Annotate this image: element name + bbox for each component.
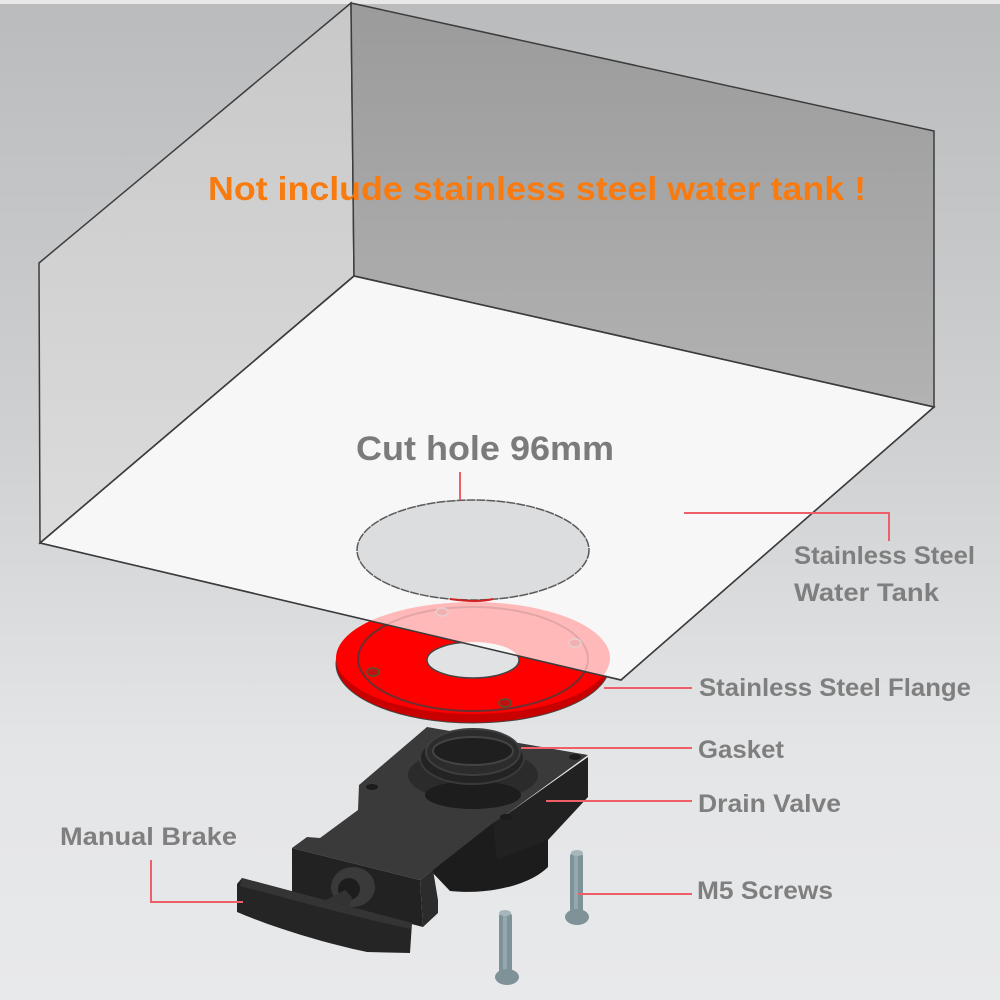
flange disc	[336, 602, 610, 714]
brake knob	[331, 867, 375, 907]
stainless steel flange label: Stainless Steel Flange	[699, 674, 971, 702]
drain valve	[237, 727, 588, 953]
stainless steel water tank label: Water Tank	[794, 579, 939, 607]
cut hole	[357, 500, 589, 601]
M5 screw right	[565, 850, 589, 925]
warning title: Not include stainless steel water tank !	[208, 170, 866, 207]
flange seen through tank floor	[372, 602, 610, 675]
flange bolt holes	[367, 668, 379, 676]
stainless steel water tank label: Stainless Steel	[794, 542, 975, 570]
M5 screw left	[495, 910, 519, 985]
manual brake handle	[237, 878, 412, 953]
flange	[336, 602, 610, 723]
drain valve label: Drain Valve	[698, 790, 841, 818]
valve side face	[493, 757, 588, 860]
slider front face	[292, 848, 423, 927]
cut hole label: Cut hole 96mm	[356, 430, 614, 468]
tank floor	[40, 276, 934, 680]
slider side face	[420, 870, 438, 927]
gasket	[420, 732, 524, 784]
water tank	[39, 3, 934, 543]
stainless steel water tank label	[684, 513, 975, 607]
valve top face	[292, 727, 588, 880]
valve recess	[408, 749, 538, 801]
M5 screws label: M5 Screws	[697, 877, 833, 905]
flange centre hole	[427, 642, 519, 678]
screw seats on valve	[569, 754, 581, 760]
tank left wall	[39, 3, 354, 543]
gasket label: Gasket	[698, 736, 785, 764]
flange rim	[336, 605, 610, 723]
manual brake label: Manual Brake	[60, 823, 237, 851]
valve lower cylinder	[430, 815, 548, 892]
tank back wall	[351, 3, 934, 407]
manual brake label	[60, 823, 243, 902]
